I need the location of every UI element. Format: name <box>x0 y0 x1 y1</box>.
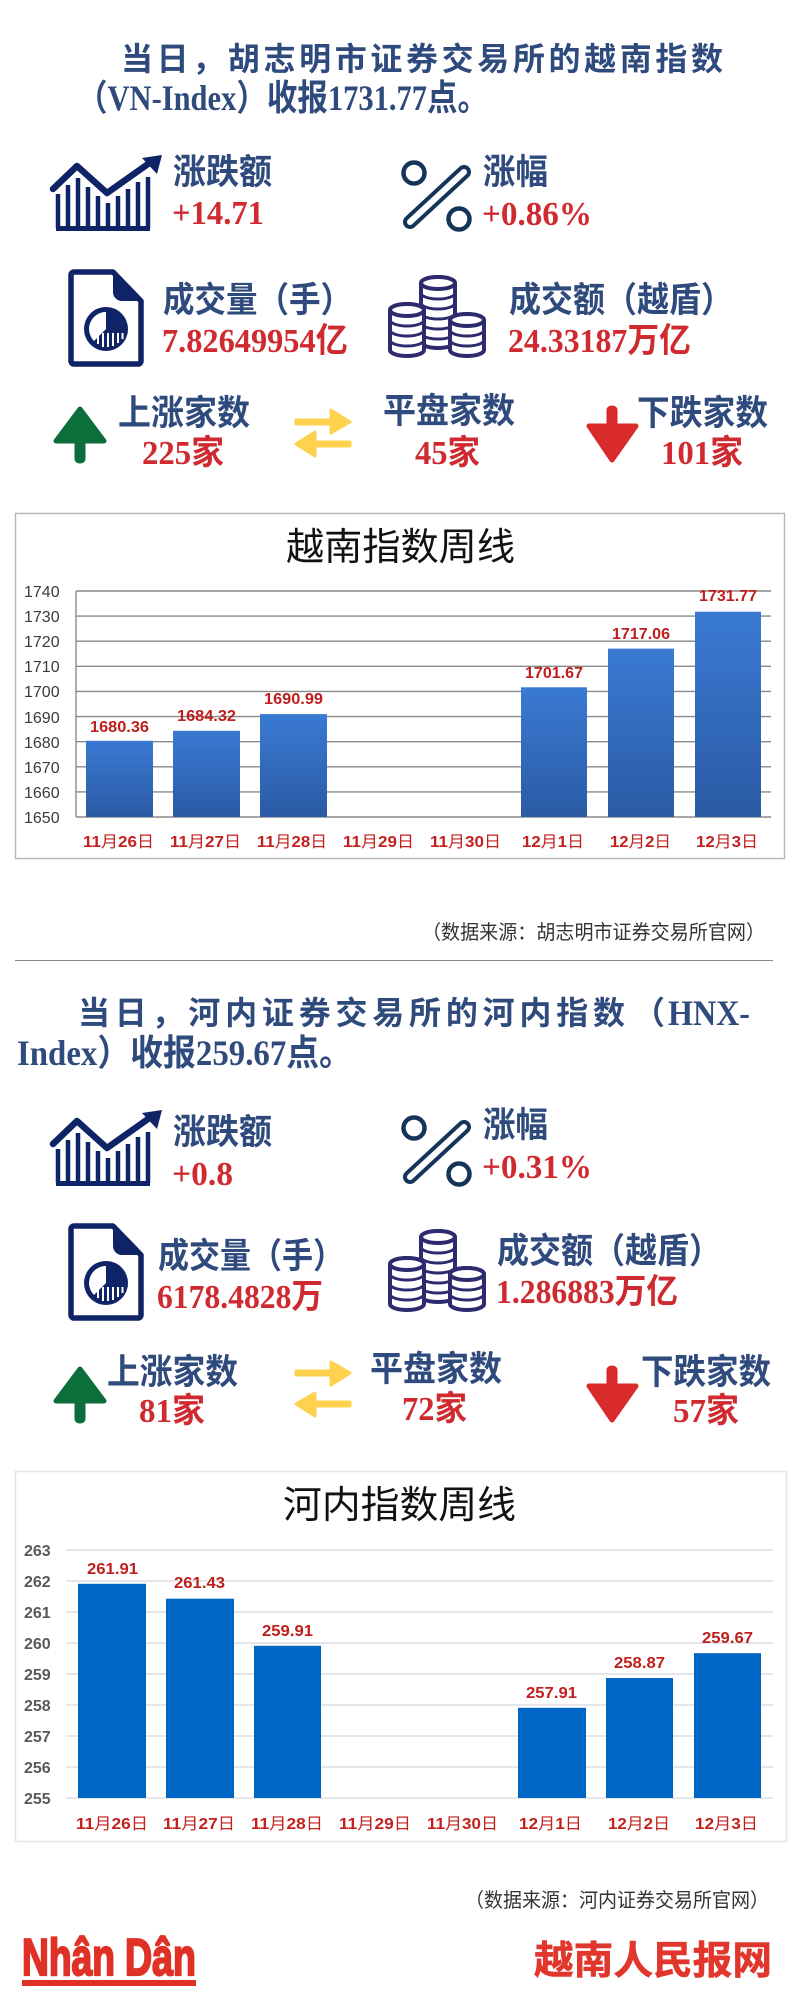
x axis dates: 11月30日 <box>430 834 501 851</box>
stat: unchanged stocks, HNX-Index <box>296 1350 502 1428</box>
stat: trading value, HNX-Index <box>390 1231 721 1311</box>
stat: change percent, HNX-Index: +0.31% <box>482 1149 592 1186</box>
x axis dates: 11月29日 <box>339 1816 411 1833</box>
stat: change percent, VN-Index: +0.86% <box>482 196 592 233</box>
y axis labels: 1740 <box>24 584 60 601</box>
heading: HNX-Index summary: 当日，河内证券交易所的河内指数 <box>78 995 625 1031</box>
icon: coin stacks <box>390 277 484 356</box>
stat: declining stocks, VN-Index: 101家 <box>661 434 743 472</box>
stat: trading value, VN-Index <box>390 277 733 360</box>
data labels: 1717.06 <box>612 626 670 643</box>
y axis labels: 258 <box>24 1698 51 1715</box>
data labels: 1680.36 <box>90 719 149 736</box>
y axis labels: 1690 <box>24 710 60 727</box>
y axis labels: 1730 <box>24 609 60 626</box>
stat: change amount, VN-Index: +14.71 <box>172 195 264 232</box>
heading: HNX-Index summary <box>17 993 750 1073</box>
stat: advancing stocks, VN-Index <box>56 394 250 472</box>
data labels: 259.91 <box>262 1623 313 1640</box>
y axis labels: 1660 <box>24 785 60 802</box>
icon: rising line chart <box>53 1110 162 1184</box>
stat: unchanged stocks, VN-Index <box>296 392 515 472</box>
heading: VN-Index summary: （VN-Index）收报1731.77点。 <box>77 78 488 118</box>
data labels: 261.43 <box>174 1575 225 1592</box>
y axis labels: 255 <box>24 1791 51 1808</box>
y axis labels: 261 <box>24 1605 51 1622</box>
heading: HNX-Index summary: Index）收报259.67点。 <box>17 1033 352 1073</box>
x axis dates: 11月26日 <box>76 1816 148 1833</box>
stat: advancing stocks, HNX-Index <box>56 1353 238 1430</box>
y axis labels: 256 <box>24 1760 51 1777</box>
icon: document with pie chart <box>71 272 141 364</box>
x axis dates <box>83 834 758 851</box>
data labels: 1684.32 <box>177 708 236 725</box>
stat: advancing stocks, HNX-Index: 上涨家数 <box>107 1353 238 1392</box>
y axis labels: 1650 <box>24 810 60 827</box>
y axis labels: 263 <box>24 1543 51 1560</box>
stat: change percent, HNX-Index: 涨幅 <box>483 1106 548 1145</box>
y axis labels: 257 <box>24 1729 51 1746</box>
data labels: 261.91 <box>87 1561 138 1578</box>
icon: yellow swap arrows <box>296 410 350 456</box>
logo: Nhan Dan: Dân <box>125 1929 196 1987</box>
stat: advancing stocks, HNX-Index: 81家 <box>139 1392 205 1430</box>
stat: unchanged stocks, HNX-Index: 平盘家数 <box>370 1350 502 1389</box>
data labels <box>87 1561 753 1702</box>
source note: Hanoi exchange: （数据来源：河内证券交易所官网） <box>465 1889 769 1912</box>
stat: trading value, HNX-Index: 1.286883万亿 <box>496 1273 678 1311</box>
y axis labels: 1700 <box>24 684 60 701</box>
stat: trading volume, HNX-Index: 成交量（手） <box>158 1237 344 1276</box>
stat: declining stocks, HNX-Index: 下跌家数 <box>641 1353 771 1392</box>
panel: VN-Index weekly bar chart <box>16 514 784 858</box>
stat: declining stocks, VN-Index <box>589 394 768 472</box>
stat: trading volume, VN-Index: 7.82649954亿 <box>162 322 348 360</box>
stat: unchanged stocks, VN-Index: 45家 <box>415 434 480 472</box>
stat: change amount, HNX-Index: 涨跌额 <box>173 1113 272 1152</box>
data labels: 259.67 <box>702 1630 753 1647</box>
icon: red down arrow <box>589 408 636 460</box>
heading: VN-Index summary <box>77 41 723 118</box>
icon: green up arrow <box>56 1369 104 1421</box>
brand name: 越南人民报网 <box>534 1940 772 1983</box>
stat: trading value, VN-Index: 成交额（越盾） <box>509 281 733 320</box>
icon: rising line chart <box>53 155 162 228</box>
icon: yellow swap arrows <box>296 1362 350 1416</box>
data labels: 257.91 <box>526 1685 577 1702</box>
x axis dates: 11月27日 <box>170 834 241 851</box>
icon: coin stacks <box>390 1231 484 1310</box>
panel: HNX-Index weekly bar chart <box>16 1472 786 1842</box>
stat: trading value, VN-Index: 24.33187万亿 <box>508 322 691 360</box>
x axis dates: 11月27日 <box>163 1816 235 1833</box>
heading: VN-Index summary: 当日，胡志明市证券交易所的越南指数 <box>121 41 723 77</box>
stat: change percent, HNX-Index <box>404 1106 592 1186</box>
icon: green up arrow <box>56 409 104 461</box>
bars <box>86 612 761 817</box>
y axis labels: 259 <box>24 1667 51 1684</box>
stat: change percent, VN-Index: 涨幅 <box>483 153 548 192</box>
stat: change amount, VN-Index: 涨跌额 <box>173 153 272 192</box>
stat: change amount, VN-Index <box>53 153 272 232</box>
x axis dates <box>76 1816 758 1833</box>
stat: declining stocks, HNX-Index: 57家 <box>673 1392 739 1430</box>
data labels: 1690.99 <box>264 691 323 708</box>
data labels <box>90 588 757 736</box>
y axis labels: 262 <box>24 1574 51 1591</box>
x axis dates: 11月30日 <box>427 1816 498 1833</box>
icon: percent sign <box>404 1118 470 1184</box>
y axis labels <box>24 584 60 827</box>
x axis dates: 12月3日 <box>696 834 758 851</box>
icon: percent sign <box>404 162 470 230</box>
stat: change percent, VN-Index <box>404 153 592 233</box>
y axis labels: 1680 <box>24 735 60 752</box>
stat: declining stocks, VN-Index: 下跌家数 <box>637 394 768 433</box>
x axis dates: 12月2日 <box>608 1816 670 1833</box>
x axis dates: 11月29日 <box>343 834 414 851</box>
stat: unchanged stocks, HNX-Index: 72家 <box>402 1390 467 1428</box>
y axis labels <box>24 1543 51 1808</box>
x axis dates: 12月1日 <box>522 834 584 851</box>
logo: Nhan Dan: Nhân <box>22 1929 115 1987</box>
y axis labels: 260 <box>24 1636 51 1653</box>
x axis dates: 11月28日 <box>257 834 327 851</box>
x axis dates: 11月28日 <box>251 1816 323 1833</box>
stat: trading volume, VN-Index: 成交量（手） <box>163 281 352 320</box>
x axis dates: 12月1日 <box>519 1816 582 1833</box>
stat: unchanged stocks, VN-Index: 平盘家数 <box>383 392 515 431</box>
chart title: 越南指数周线 <box>286 527 515 569</box>
stat: advancing stocks, VN-Index: 225家 <box>142 434 224 472</box>
chart title: 河内指数周线 <box>283 1485 516 1527</box>
data labels: 258.87 <box>614 1655 665 1672</box>
y axis labels: 1720 <box>24 634 60 651</box>
icon: document with pie chart <box>71 1226 141 1318</box>
x axis dates: 12月3日 <box>695 1816 758 1833</box>
x axis dates: 12月2日 <box>610 834 671 851</box>
data labels: 1701.67 <box>525 665 583 682</box>
y axis labels: 1670 <box>24 760 60 777</box>
heading: HNX-Index summary: （ <box>633 995 665 1031</box>
stat: trading volume, VN-Index <box>71 272 352 364</box>
stat: trading value, HNX-Index: 成交额（越盾） <box>497 1232 721 1271</box>
stat: change amount, HNX-Index <box>53 1110 272 1193</box>
bars <box>78 1584 761 1798</box>
x axis dates: 11月26日 <box>83 834 154 851</box>
stat: advancing stocks, VN-Index: 上涨家数 <box>118 394 250 433</box>
stat: trading volume, HNX-Index: 6178.4828万 <box>157 1279 323 1316</box>
y axis labels: 1710 <box>24 659 60 676</box>
icon: red down arrow <box>589 1368 636 1420</box>
stat: trading volume, HNX-Index <box>71 1226 344 1318</box>
source note: Ho Chi Minh exchange: （数据来源：胡志明市证券交易所官网） <box>422 921 765 944</box>
stat: change amount, HNX-Index: +0.8 <box>172 1156 233 1193</box>
data labels: 1731.77 <box>699 588 757 605</box>
stat: declining stocks, HNX-Index <box>589 1353 771 1430</box>
heading: HNX-Index summary: HNX- <box>668 993 750 1033</box>
